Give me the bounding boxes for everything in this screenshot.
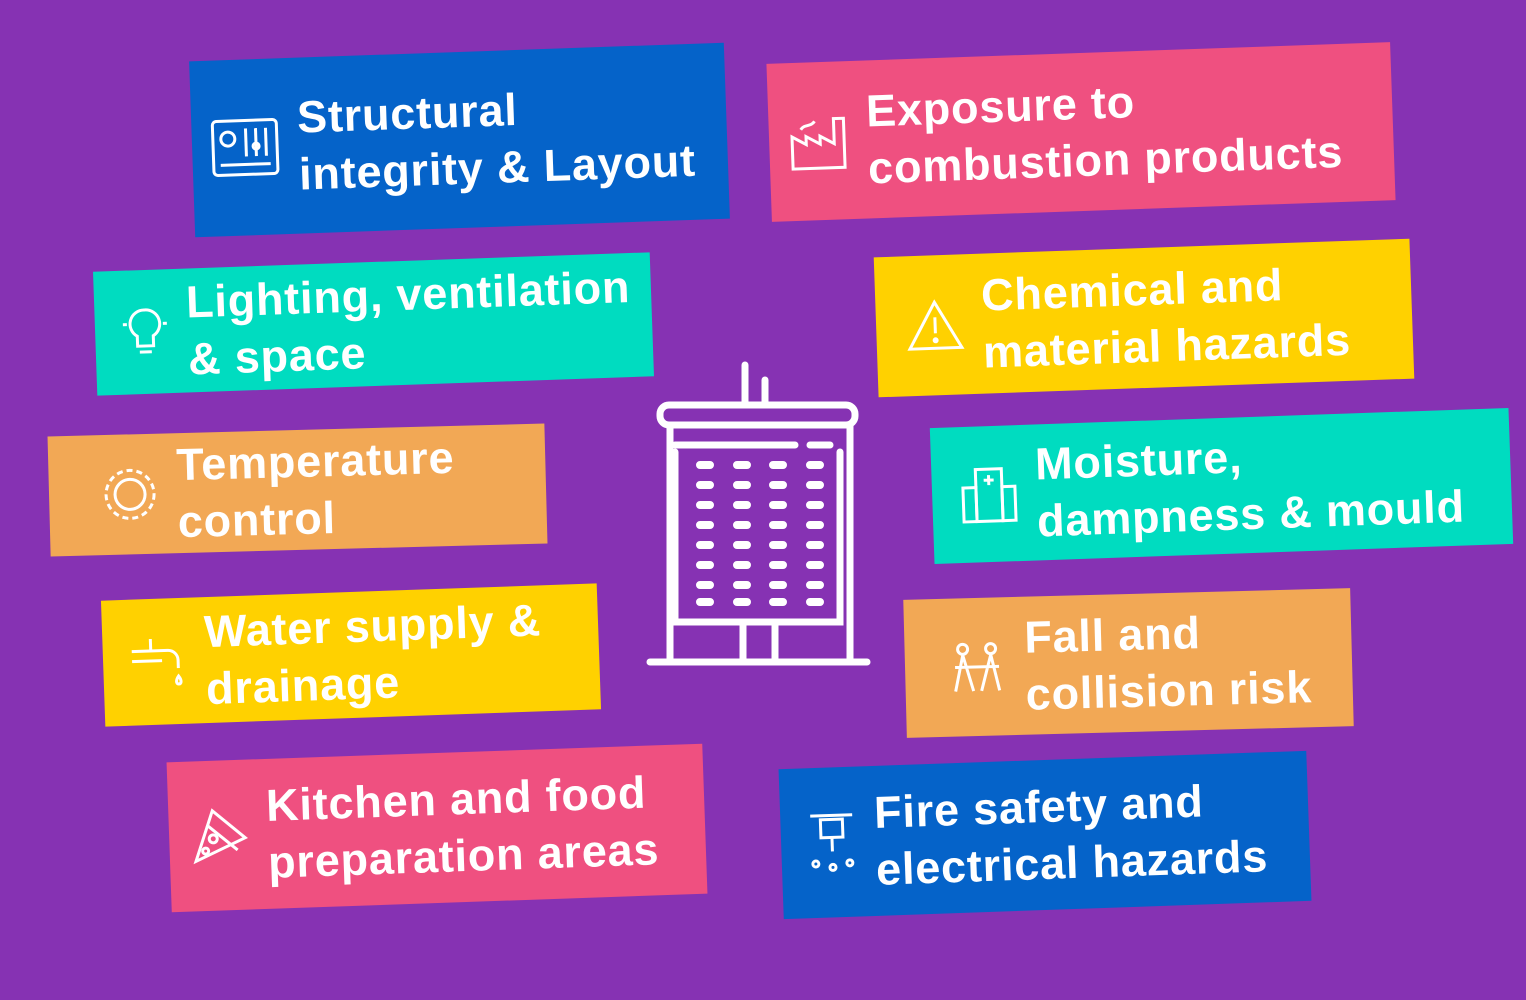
- icon: bulb: [122, 308, 167, 354]
- panel: fire: [779, 751, 1311, 919]
- text: Moisture,: [1034, 431, 1243, 489]
- icon: sprinkler: [810, 813, 854, 872]
- icon: warning: [908, 299, 964, 351]
- icon: control panel: [210, 118, 280, 177]
- text: Fire safety and: [873, 775, 1204, 838]
- text: material hazards: [982, 314, 1352, 378]
- text: dampness & mould: [1036, 481, 1466, 546]
- text: Fall and: [1024, 607, 1201, 663]
- icon: sun: [104, 468, 156, 520]
- panel: structural integrity: [189, 43, 730, 237]
- icon: tap: [132, 639, 183, 686]
- icon: pizza: [194, 808, 248, 864]
- text: collision risk: [1025, 661, 1313, 720]
- icon: people: [954, 642, 1002, 692]
- icon: factory: [790, 116, 847, 171]
- text: control: [177, 492, 336, 547]
- panel: moisture: [930, 408, 1513, 564]
- text: Kitchen and food: [265, 767, 647, 831]
- panel: fall: [903, 588, 1354, 738]
- text: Lighting, ventilation: [185, 261, 631, 328]
- text: Temperature: [176, 432, 455, 490]
- text: [1034, 431, 1466, 546]
- text: Chemical and: [980, 259, 1284, 321]
- text: [1024, 607, 1313, 720]
- text: [865, 76, 1344, 193]
- text: [185, 261, 631, 384]
- text: preparation areas: [267, 823, 660, 888]
- icon: central building: [646, 362, 870, 666]
- text: combustion products: [867, 126, 1344, 193]
- text: & space: [187, 327, 367, 384]
- panel: water: [101, 583, 601, 727]
- panel: temperature: [48, 424, 547, 556]
- icon: hospital: [961, 467, 1018, 524]
- text: Water supply &: [203, 594, 542, 657]
- panel: kitchen: [167, 744, 707, 912]
- text: [265, 767, 660, 888]
- text: drainage: [205, 656, 401, 714]
- panel: combustion: [766, 42, 1396, 222]
- panel: lighting: [93, 252, 654, 396]
- panel: chemical: [874, 239, 1414, 397]
- text: [203, 594, 542, 714]
- text: Exposure to: [865, 76, 1136, 136]
- text: [176, 432, 455, 547]
- text: [873, 775, 1269, 895]
- text: electrical hazards: [875, 830, 1269, 895]
- text: [980, 259, 1352, 378]
- text: [296, 84, 697, 200]
- text: integrity & Layout: [298, 135, 697, 200]
- text: Structural: [296, 84, 518, 143]
